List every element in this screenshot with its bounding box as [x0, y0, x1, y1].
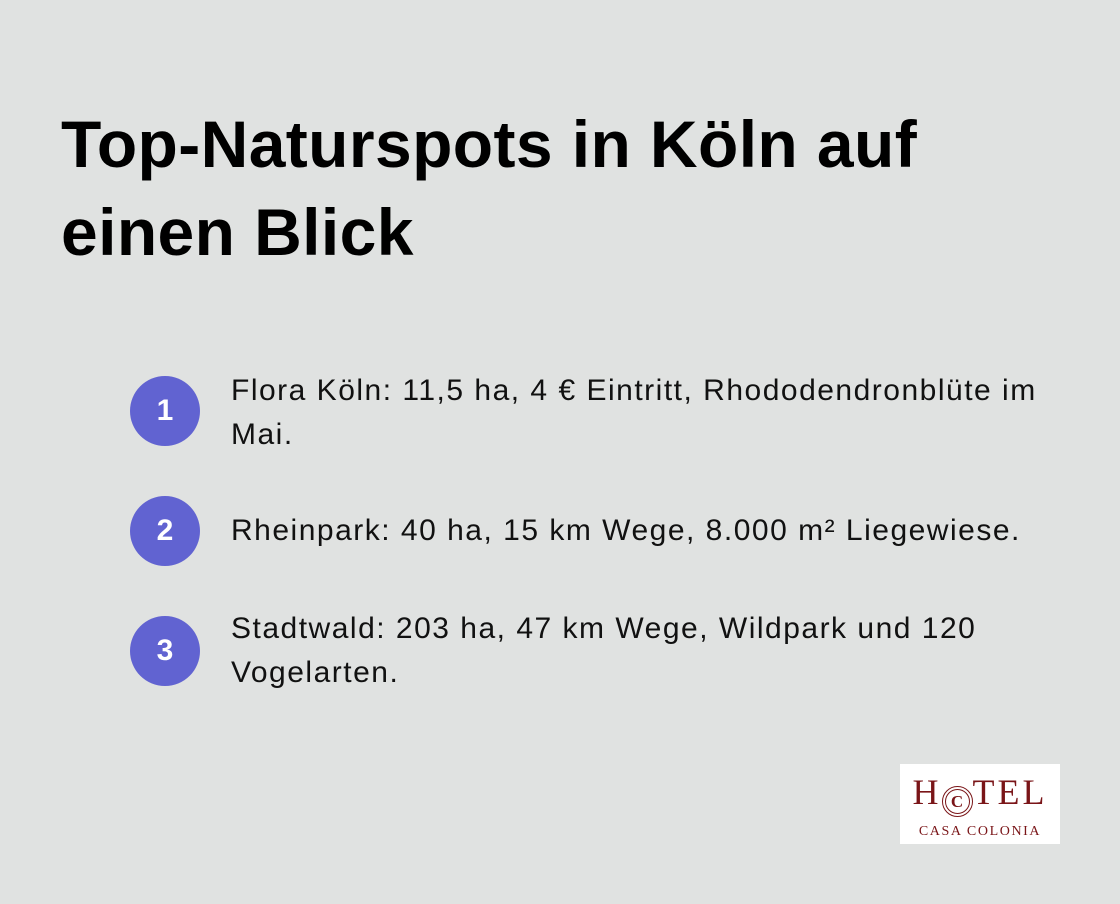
text 1: Mai.: [231, 418, 294, 451]
icon: number 1: [130, 376, 200, 446]
logo: [900, 764, 1060, 844]
icon: number 2: [130, 496, 200, 566]
text 1: Flora Köln: 11,5 ha, 4 € Eintritt, Rhododendronblüte im: [231, 374, 1037, 407]
text 1: [231, 374, 1037, 451]
title: Top-Naturspots in Köln auf: [61, 107, 917, 181]
title: einen Blick: [61, 195, 414, 269]
text 3: Vogelarten.: [231, 656, 399, 689]
text 2: Rheinpark: 40 ha, 15 km Wege, 8.000 m² Liegewiese.: [231, 514, 1021, 547]
icon: number 3: 3: [157, 634, 173, 667]
item 1: [130, 374, 1037, 451]
title: [61, 107, 917, 269]
text 3: Stadtwald: 203 ha, 47 km Wege, Wildpark und 120: [231, 612, 976, 645]
logo: C: [951, 792, 963, 811]
item 3: [130, 612, 976, 689]
logo: H TEL: [912, 772, 1047, 812]
logo: CASA COLONIA: [919, 824, 1041, 839]
icon: number 3: [130, 616, 200, 686]
text 3: [231, 612, 976, 689]
item 2: [130, 496, 1021, 566]
icon: number 1: 1: [157, 394, 173, 427]
icon: number 2: 2: [157, 514, 173, 547]
